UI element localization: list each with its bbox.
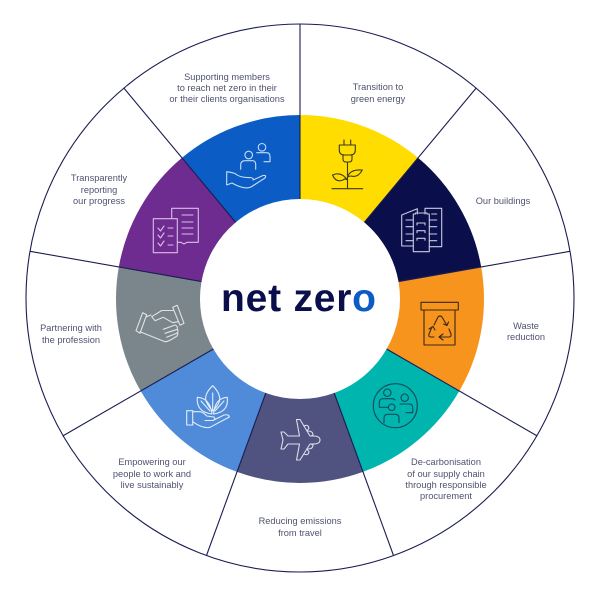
label: transparently reporting: reporting [81,185,117,195]
label: waste reduction: Waste [513,321,539,331]
label: reducing emissions: Reducing emissions [259,516,342,526]
icon: group in circle [373,384,417,428]
ring segment: travel [237,393,363,483]
label: transparently reporting: our progress [73,196,125,206]
label: empowering our people: people to work and [113,469,191,479]
icon: hand holding leaves [187,386,229,428]
label: our buildings: Our buildings [476,196,531,206]
icon: airplane [281,420,320,460]
label: partnering: the profession [42,335,100,345]
ring segment: buildings [364,158,481,282]
label: de-carbonisation: De-carbonisation [411,457,481,467]
label: waste reduction: reduction [507,332,545,342]
ring segment: members [182,115,300,222]
label: transition to green energy: green energy [351,94,406,104]
label: supporting members: to reach net zero in their [177,83,277,93]
ring segment: supply chain [334,349,459,472]
label: supporting members: or their clients organisations [169,94,285,104]
label: partnering: Partnering with [40,323,102,333]
label: supporting members: Supporting members [184,72,270,82]
label: de-carbonisation: of our supply chain [407,469,485,479]
icon: plug with plant [332,140,363,189]
centre title: net zero [221,277,376,320]
icon: checklist documents [153,208,198,253]
icon: recycling bin [421,302,458,345]
ring segment: people [141,349,266,472]
label: reducing emissions: from travel [278,528,322,538]
ring segment: waste [387,267,484,391]
icon: buildings [402,208,442,252]
ring segment: profession [116,267,213,391]
icon: hand with people [227,144,270,188]
label: transparently reporting: Transparently [71,173,127,183]
ring segment: green energy [300,115,418,222]
label: transition to green energy: Transition to [353,82,403,92]
label: empowering our people: live sustainably [121,480,184,490]
ring segment: reporting [119,158,236,282]
label: de-carbonisation: through responsible [405,480,487,490]
label: empowering our people: Empowering our [118,457,186,467]
icon: handshake [136,305,184,342]
label: de-carbonisation: procurement [420,491,472,501]
